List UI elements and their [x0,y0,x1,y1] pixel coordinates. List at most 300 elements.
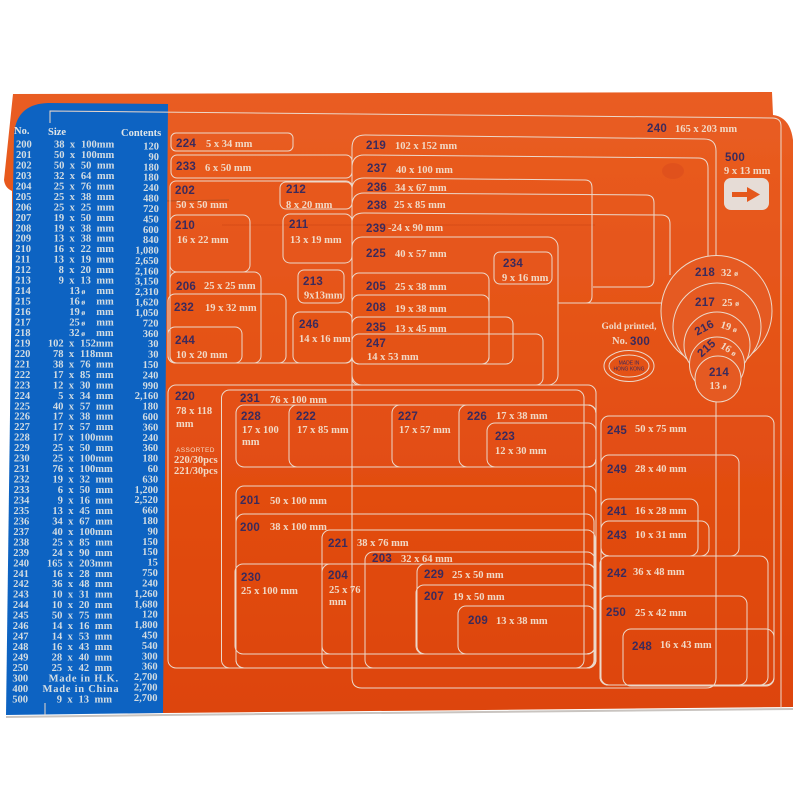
column: contents: 450 [142,631,158,641]
box 208: 19 x 38 mm [395,304,447,315]
column: sizes: mm [97,202,114,213]
box 213: 9x13mm [304,290,343,302]
box 227 [392,405,596,467]
box 249: 28 x 40 mm [635,464,687,475]
column: sizes: x [69,234,75,245]
column: contents [134,142,159,704]
box 230 [235,564,595,654]
column: sizes: x [68,475,74,485]
column: sizes: 100mm [80,464,113,475]
column: sizes: 19 [52,475,63,485]
column: sizes: mm [95,632,113,643]
column: item numbers: 225 [14,401,30,412]
column: sizes: 90 [79,548,90,559]
column: item numbers: 227 [14,422,30,433]
column: sizes: x [69,380,75,391]
box 234: 9 x 16 mm [502,273,549,284]
box 234: 234 [503,258,523,270]
column: contents: 2,700 [134,693,158,704]
box 228: 17 x 100 [242,425,279,436]
column: contents: 60 [148,464,158,475]
column: sizes: 100mm [79,527,113,538]
box 224 [171,133,293,151]
column: sizes: 19 [54,213,64,224]
box 219: 102 x 152 mm [395,141,457,152]
column: sizes: 75 [79,611,89,622]
column: sizes: 57 [80,401,90,412]
box 243 [601,521,709,556]
box 245 [601,416,774,685]
column: sizes: mm [97,234,114,245]
column: sizes: 16 [69,297,80,308]
column: item numbers: 236 [13,516,29,527]
column: item numbers: 239 [13,548,29,559]
box 236: 236 [367,182,387,194]
column: item numbers: 229 [14,443,30,454]
column: sizes: 19 [54,223,64,234]
column: sizes: 16 [79,496,90,507]
column: sizes: 19 [80,255,91,266]
column: sizes: x [68,590,74,601]
column: sizes: 10 [52,600,62,611]
column: sizes: 17 [53,433,63,444]
box 229: 25 x 50 mm [452,570,504,581]
box 213 [298,270,344,303]
box 247 [352,334,543,385]
column: sizes: 32 [79,475,90,485]
column: sizes: 25 [52,663,62,674]
box 223: 12 x 30 mm [495,446,547,457]
column: sizes: ø [81,298,85,307]
column: contents: 630 [142,474,158,485]
gold printed note: Gold printed, [602,322,657,332]
column: sizes: x [70,171,76,182]
box 200: 200 [240,522,260,534]
column: sizes: x [69,255,75,266]
column: sizes: x [68,632,74,643]
column: sizes: x [70,192,76,203]
box 221 [322,530,595,668]
column: sizes: mm [97,223,114,234]
column: sizes: x [68,611,74,622]
column: item numbers: 215 [15,297,31,308]
column: item numbers: 210 [15,244,31,255]
box 220: 220 [175,391,195,403]
column: sizes: mm [97,181,115,192]
column: sizes: 9 [57,694,62,705]
column: item numbers: 207 [16,213,31,224]
column: contents: 2,700 [134,682,158,693]
column: sizes: 38 [54,140,65,150]
box 202 [170,181,352,363]
column: item numbers: 230 [14,454,30,465]
column: item numbers: 500 [12,694,28,705]
column: sizes: mm [97,213,114,224]
icon: arrow tag [724,178,769,210]
column: contents: 120 [142,610,158,621]
column: sizes: x [69,422,75,433]
column: sizes: 100mm [81,150,114,161]
column: sizes: 50 [79,485,90,496]
column: sizes: mm [97,171,115,182]
column: item numbers: 249 [13,653,28,663]
column: contents: 30 [148,350,158,361]
box 212: 8 x 20 mm [286,200,333,211]
column: item numbers: 218 [15,328,31,339]
column: item numbers: 244 [13,600,29,611]
column: sizes: x [70,160,76,171]
column: sizes: mm [97,244,114,255]
column: sizes: mm [95,516,113,527]
column: sizes: x [68,548,74,559]
column: sizes: x [69,370,75,381]
box 205 [352,273,489,364]
sheet shadow [6,708,793,718]
column: sizes: 76 [53,464,63,475]
box 232: 19 x 32 mm [205,303,257,314]
column: sizes: mm [96,391,114,402]
column: sizes: mm [95,485,113,496]
column: sizes: 17 [53,370,63,381]
column: contents: 450 [143,214,159,225]
box 208 [352,295,489,364]
column: sizes: 76 [80,359,91,370]
column: sizes: 38 [81,234,91,245]
column: sizes: 13 [53,255,64,266]
column: item numbers: 233 [14,485,30,496]
panel: blue size table [6,103,168,715]
table header: Contents [121,128,161,139]
column: sizes: 30 [80,380,90,391]
column: sizes: mm [96,422,114,433]
column: item numbers: 217 [15,318,31,328]
column: contents: 720 [143,318,159,329]
box 237: 237 [367,163,387,175]
box 226: 17 x 38 mm [496,411,548,422]
box 230: 25 x 100 mm [241,586,298,597]
column: sizes: mm [94,694,112,705]
column: sizes: 48 [79,579,90,590]
column: contents: 1,260 [134,589,158,600]
column: contents: 2,520 [134,495,158,506]
column: sizes: 53 [79,632,89,643]
box 224: 224 [176,138,196,150]
column: sizes: 100mm [80,433,113,444]
column: sizes: 6 [58,485,63,496]
gold printed note [602,322,657,382]
box 241 [601,499,698,556]
column: sizes: 13 [80,276,91,287]
column: sizes: x [70,150,76,161]
column: item numbers: 204 [16,181,32,192]
column: item numbers: 231 [14,464,30,475]
column: sizes: 25 [81,202,91,213]
circle 218: 32 ø [721,268,738,279]
box 231: 76 x 100 mm [270,395,327,406]
box 231 [222,390,584,668]
box 224: 5 x 34 mm [206,139,253,150]
box 248: 248 [632,641,652,653]
column: sizes: x [68,516,74,527]
column: contents: 1,200 [134,485,158,496]
column: sizes: x [68,464,74,475]
box 232 [168,294,286,363]
box 230: 230 [241,572,261,584]
column: sizes: 38 [53,359,64,370]
column: contents: 660 [142,506,158,517]
column: item numbers: 208 [15,223,31,234]
column: contents: 3,150 [135,277,159,288]
column: sizes: 85 [79,537,90,548]
box 228: 228 [241,411,261,423]
column: contents: 480 [143,194,159,205]
box 227: 227 [398,411,418,423]
column: sizes: 38 [81,223,91,234]
box 204: 25 x 76 [329,585,360,596]
column: item numbers: 246 [13,621,29,632]
box 211 [283,214,352,263]
box 210: 210 [175,220,195,232]
box 207 [416,585,595,654]
box 221: 38 x 76 mm [357,538,409,549]
box 232: 232 [174,302,194,314]
box 213: 213 [303,276,323,288]
box 229 [417,564,595,654]
column: sizes: 38 [81,192,91,203]
orange folder sheet [4,92,793,714]
table header: No. [14,126,30,137]
column: sizes: mm [96,276,114,287]
column: sizes: x [69,338,75,349]
box 250: 25 x 42 mm [635,608,687,619]
column: sizes: x [68,506,74,517]
column: sizes: 25 [69,318,80,328]
column: item numbers: 247 [13,632,29,643]
column: sizes: 42 [79,663,89,674]
box 219: 219 [366,140,386,152]
column: sizes: 16 [52,642,62,653]
box 229: 229 [424,569,444,581]
column: contents: 540 [142,641,158,652]
column: sizes: 24 [52,548,63,559]
column: sizes: x [70,202,76,213]
column: sizes: x [69,244,75,255]
column: contents: 150 [142,547,158,558]
box 246 [293,312,352,363]
column: item numbers: 235 [14,506,29,517]
box 207: 19 x 50 mm [453,592,505,603]
circle 218 [661,256,772,366]
column: item numbers: 214 [15,286,32,297]
box 237 [352,155,708,303]
box 248: 16 x 43 mm [660,640,712,651]
box 212: 212 [286,184,306,196]
circle 214: 214 [709,367,729,379]
column: sizes: x [68,527,74,538]
column: contents: 2,700 [134,672,158,683]
box 239: -24 x 90 mm [388,223,443,234]
column: sizes: x [68,600,74,611]
column: contents: 2,160 [135,266,159,277]
column: item numbers: 250 [12,663,28,674]
column: sizes: 40 [53,401,63,412]
column: contents: 600 [143,225,159,236]
box 204: 204 [328,570,348,582]
column: sizes: 67 [79,516,90,527]
column: sizes: 50 [52,611,62,622]
box 202: 50 x 50 mm [176,200,228,211]
box 225: 40 x 57 mm [395,249,447,260]
column: contents: 750 [142,568,158,579]
column: contents: 240 [142,578,158,589]
column: sizes: mm [95,506,113,517]
box 211: 211 [289,219,309,231]
column: sizes: x [69,276,75,287]
column: sizes: 64 [81,171,92,182]
box 236 [352,178,592,303]
column: sizes: 34 [80,391,91,402]
box 245: 245 [607,425,627,437]
box 226: 226 [467,411,487,423]
box 221: 221 [328,538,348,550]
box 211: 13 x 19 mm [290,235,342,246]
column: sizes: 25 [54,181,64,192]
column: item numbers: 203 [16,171,32,182]
column: sizes: 10 [52,590,63,601]
column: item numbers: 243 [13,590,29,601]
column: contents: 300 [142,651,158,662]
column: sizes: mm [96,297,114,308]
column: sizes: 14 [52,621,63,632]
column: sizes: mm [95,579,113,590]
fold crease [222,224,595,226]
column: sizes: ø [81,319,85,327]
seal: made in Hong Kong: HONG KONG [613,366,645,372]
column: sizes: 13 [69,286,80,297]
box 238: 25 x 85 mm [394,200,446,211]
column: sizes: 43 [79,642,89,653]
column: contents: 720 [143,204,159,215]
column: sizes: x [70,140,76,150]
column: item numbers: 224 [14,391,31,402]
column: sizes: x [69,265,75,276]
column: sizes: mm [96,359,114,370]
column: sizes: mm [96,307,114,318]
column: item numbers: 228 [14,433,30,444]
box 228 [236,405,596,467]
column: sizes: x [68,537,74,548]
column: contents: 360 [142,422,158,433]
box 233 [171,155,352,178]
column: sizes: mm [95,663,112,674]
circle 217: 25 ø [722,298,739,309]
column: sizes: 25 [53,443,63,454]
column: contents: 90 [147,526,158,537]
column: item numbers: 245 [13,611,29,622]
box 220: 78 x 118 [176,406,212,417]
column: sizes: 102 [48,338,64,349]
column: contents: 2,160 [135,391,158,402]
box 222 [289,405,596,467]
column: sizes: 78 [53,349,64,360]
column: contents: 360 [142,662,158,673]
box 242: 36 x 48 mm [633,567,685,578]
column: sizes: 25 [54,202,64,213]
column: sizes: mm [97,160,115,171]
column: sizes: 165 [47,558,63,569]
column: contents: 2,310 [135,287,159,298]
box 209: 209 [468,615,488,627]
column: sizes: x [70,213,76,224]
box 246: 14 x 16 mm [299,334,351,345]
box 227: 17 x 57 mm [399,425,451,436]
column: sizes: mm [96,443,113,454]
box 238 [352,193,654,287]
box 244: 10 x 20 mm [176,350,228,361]
column: item numbers: 216 [15,307,31,318]
column: sizes: 118mm [80,349,113,360]
column: sizes: x [70,181,76,192]
column: item numbers: 232 [14,475,30,485]
column: item numbers: 209 [15,234,31,245]
column: contents: 120 [143,142,159,152]
column: sizes: 40 [52,527,63,538]
column: sizes: 85 [80,370,90,381]
box 200 [236,514,594,668]
column: sizes: 50 [80,443,90,454]
box 222: 222 [296,411,316,423]
column: sizes: x [68,642,74,653]
box 235: 13 x 45 mm [395,324,447,335]
column: sizes: mm [96,318,114,328]
column: sizes: mm [96,286,114,297]
column: sizes: x [68,558,74,569]
round labels 214 to 218 [661,256,772,402]
column: sizes: 20 [79,600,89,611]
column: sizes: x [69,433,75,444]
box 206 [170,272,261,363]
box 223 [487,423,596,467]
column: sizes: 9 [59,276,64,287]
column: item numbers: 240 [13,558,29,569]
column: item numbers: 226 [14,412,30,423]
box 240 outer frame [45,111,781,715]
box 246: 246 [299,319,319,331]
column: sizes: 57 [80,422,90,433]
box 244 [168,327,242,363]
column: contents: 1,050 [135,308,159,319]
box 239: 239 [366,223,386,235]
column: contents: 1,800 [134,620,158,631]
circle 216: 19 ø [719,320,739,335]
box 240 outer frame: 165 x 203 mm [675,124,737,135]
column: sizes: mm [96,412,114,423]
box 206: 206 [176,281,196,293]
box 226 [459,405,596,467]
column: sizes: mm [96,328,114,339]
column: sizes: mm [95,496,113,507]
column: sizes: 17 [53,422,63,433]
column: item numbers: 300 [12,674,28,684]
column: sizes: x [68,485,74,496]
column: sizes: 13 [52,506,63,517]
column: sizes: x [68,663,74,674]
column: sizes: 28 [79,569,90,580]
column: contents: 180 [143,162,159,173]
column: item numbers: 201 [16,150,32,161]
seal: made in Hong Kong: MADE IN [619,360,640,366]
circle 214 [695,356,741,402]
